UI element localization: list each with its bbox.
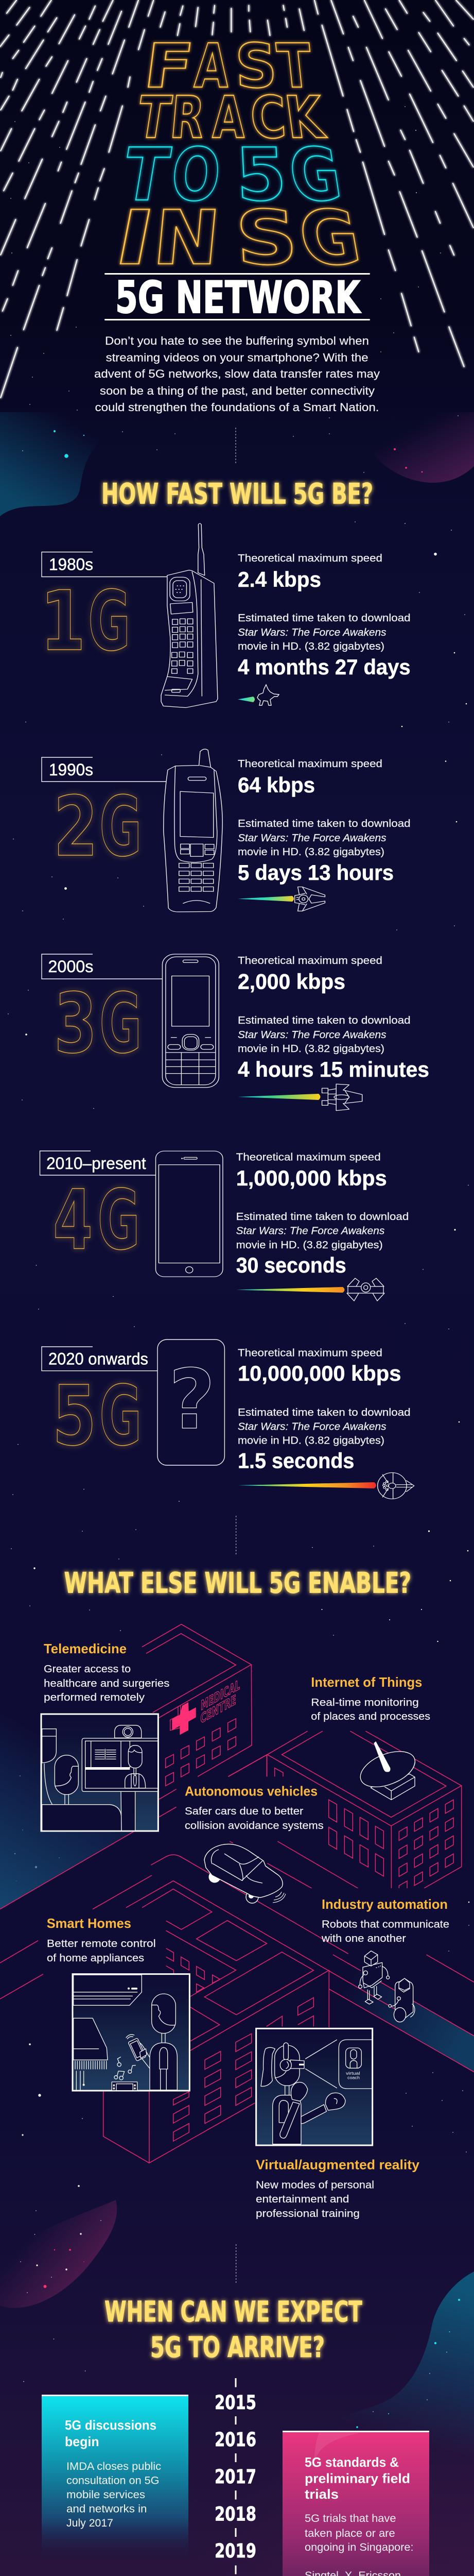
speed text 3G: 4 hours 15 minutes	[238, 1057, 429, 1081]
speed text 4G	[236, 1152, 409, 1277]
robot one	[359, 1951, 390, 2004]
comms building	[229, 1731, 462, 1894]
nebula blob: pink top right	[363, 412, 474, 483]
speed text 4G: Estimated time taken to download	[236, 1211, 409, 1223]
panel: 5G discussions begin: 5G discussions	[65, 2417, 156, 2433]
speed text 1G: Estimated time taken to download	[238, 613, 411, 624]
year label 2010-present	[40, 1151, 155, 1175]
title line: TRACK: K	[281, 83, 329, 151]
speed text 2G: 5 days 13 hours	[238, 860, 394, 885]
neon label 1G	[40, 573, 131, 669]
timeline years: 2017	[215, 2466, 256, 2488]
title line: FAST: F	[140, 30, 198, 101]
glow: city left	[0, 1695, 134, 1909]
panel: 5G standards and trials	[283, 2431, 429, 2576]
speed text 1G: Theoretical maximum speed	[238, 553, 382, 564]
callout: virtual and augmented reality: New modes of personal	[256, 2179, 374, 2191]
heading: When can we expect 5G to arrive?: 5G TO ARRIVE?	[150, 2331, 325, 2364]
speed text 4G: 1,000,000 kbps	[236, 1166, 387, 1190]
nebula blob: blue top left	[0, 412, 106, 516]
intro paragraph: streaming videos on your smartphone? With the	[106, 351, 368, 364]
speed text 3G: movie in HD. (3.82 gigabytes)	[238, 1043, 384, 1055]
panel: 5G standards and trials: 5G trials that have	[305, 2513, 396, 2524]
callout: telemedicine: performed remotely	[44, 1691, 145, 1703]
speed text 5G: 10,000,000 kbps	[238, 1361, 401, 1385]
glow: robot road	[329, 1955, 474, 2072]
title line: TRACK: T	[133, 84, 175, 151]
callout: telemedicine: Greater access to	[44, 1663, 131, 1675]
year label 2010-present: 2010–present	[46, 1154, 146, 1173]
chart: vertical timeline	[215, 2378, 256, 2576]
panel: 5G discussions begin: and networks in	[66, 2503, 147, 2515]
panel: 2G row	[42, 749, 411, 912]
title: Fast Track to 5G in SG	[108, 30, 367, 282]
callout: telemedicine	[44, 1641, 169, 1703]
year label 2000s: 2000s	[48, 957, 93, 976]
speed text 3G	[238, 955, 429, 1081]
intro paragraph	[94, 334, 380, 414]
speed text 4G: movie in HD. (3.82 gigabytes)	[236, 1240, 383, 1251]
speed text 2G: movie in HD. (3.82 gigabytes)	[238, 846, 384, 858]
panel: 5G standards and trials: ongoing in Singapore:	[305, 2541, 414, 2553]
panel: 1G row	[40, 523, 411, 707]
panel: 5G standards and trials: preliminary field	[305, 2471, 410, 2486]
icon: autonomous car	[204, 1844, 286, 1903]
speed streaks	[0, 0, 473, 398]
callout: telemedicine: Telemedicine	[44, 1641, 127, 1656]
title line: TO 5G	[117, 133, 347, 217]
neon label 3G: 3	[54, 975, 97, 1072]
neon label 5G: G	[99, 1368, 142, 1464]
speed text 4G: Theoretical maximum speed	[236, 1152, 381, 1163]
label: virtual coach: virtual	[346, 2071, 360, 2076]
label: virtual coach: coach	[347, 2075, 360, 2080]
title line: IN SG: N	[150, 195, 224, 282]
callout: autonomous vehicles: Safer cars due to better	[185, 1805, 303, 1817]
speed text 1G: 4 months 27 days	[238, 655, 411, 679]
panel: 4G row	[40, 1151, 409, 1301]
title line: TRACK: A	[212, 84, 245, 151]
icon: mystery phone with question mark	[157, 1340, 224, 1465]
icon: 1990s mobile phone	[164, 749, 222, 912]
neon label 4G: 4	[53, 1172, 93, 1268]
subtitle: 5G Network: 5G NETWORK	[115, 272, 361, 324]
callout: industry automation: Industry automation	[322, 1896, 448, 1912]
speed text 3G: 2,000 kbps	[238, 969, 345, 993]
timeline years: 2015	[215, 2392, 256, 2414]
dashed connector 3	[236, 2244, 237, 2283]
picture: telemedicine scene	[41, 1714, 158, 1831]
dashed connector 1	[235, 428, 236, 465]
upper right of lower block and road	[267, 1955, 474, 2072]
icon: brick phone	[161, 523, 218, 707]
neon label 2G: G	[99, 778, 142, 875]
label: virtual coach	[346, 2071, 360, 2080]
year label 2020 onwards: 2020 onwards	[48, 1350, 148, 1368]
trail and starfighter icon	[238, 1084, 362, 1111]
trail and falcon icon	[238, 1472, 414, 1499]
panel: 5G discussions begin: consultation on 5G	[66, 2475, 160, 2486]
title line: FAST: T	[274, 30, 315, 101]
neon label 5G: 5	[52, 1368, 96, 1464]
speed text 5G: Theoretical maximum speed	[238, 1348, 382, 1359]
panel: 5G discussions begin	[42, 2395, 188, 2560]
callout: autonomous vehicles	[185, 1784, 324, 1832]
neon label 1G: G	[88, 573, 131, 669]
trail and TIE fighter icon	[236, 1278, 384, 1301]
timeline years	[215, 2392, 256, 2576]
speed text 1G: movie in HD. (3.82 gigabytes)	[238, 641, 384, 652]
neon label 4G	[53, 1172, 140, 1268]
title line: TRACK: C	[249, 83, 288, 151]
heading: How fast will 5G be?: HOW FAST WILL 5G BE?	[101, 477, 373, 511]
speed text 5G: Estimated time taken to download	[238, 1407, 411, 1418]
intro paragraph: advent of 5G networks, slow data transfer rates may	[94, 367, 380, 380]
neon label 3G	[54, 975, 142, 1072]
dashed connector 2	[236, 1516, 237, 1554]
neon label 5G	[52, 1368, 142, 1464]
title line: TO 5G: T	[117, 133, 175, 217]
speed text 1G: Star Wars: The Force Awakens	[238, 627, 387, 638]
panel: 5G discussions begin: July 2017	[66, 2517, 113, 2529]
timeline years: 2016	[215, 2429, 256, 2451]
speed text 2G	[238, 758, 411, 885]
callout: smart homes: of home appliances	[47, 1952, 144, 1964]
title line: TO 5G: G	[284, 133, 347, 217]
callout: telemedicine: healthcare and surgeries	[44, 1677, 169, 1689]
speed text 5G: Star Wars: The Force Awakens	[238, 1421, 387, 1432]
speed text 5G	[238, 1348, 411, 1472]
sign: Medical Centre: MEDICAL	[201, 1677, 240, 1714]
title line: TO 5G: 5	[234, 133, 288, 217]
intro paragraph: could strengthen the foundations of a Smart Nation.	[95, 401, 379, 414]
panel: 5G standards and trials: trials	[305, 2486, 339, 2502]
speed text 3G: Estimated time taken to download	[238, 1015, 411, 1026]
callout: smart homes: Smart Homes	[47, 1916, 131, 1931]
callout: virtual and augmented reality: Virtual/augmented reality	[256, 2157, 420, 2173]
panel: 5G discussions begin: begin	[65, 2434, 99, 2449]
callout: virtual and augmented reality: entertainment and	[256, 2193, 349, 2205]
speed text 3G: Star Wars: The Force Awakens	[238, 1029, 387, 1041]
timeline years: 2019	[215, 2540, 256, 2562]
title line: IN SG	[108, 194, 367, 282]
panel: 5G row	[42, 1340, 414, 1499]
icon: mystery phone with question mark: ?	[169, 1351, 215, 1448]
speed text 2G: Estimated time taken to download	[238, 818, 411, 829]
panel: 5G discussions begin: mobile services	[66, 2489, 145, 2501]
picture: smart home scene	[73, 1974, 189, 2091]
icon: smartphone	[156, 1151, 223, 1277]
sign: Medical Centre: CENTRE	[200, 1692, 236, 1727]
speed text 1G	[238, 553, 411, 679]
icon: satellite dish	[355, 1741, 420, 1800]
title line: IN SG: S	[233, 195, 300, 282]
title line: IN SG: I	[108, 194, 161, 282]
neon label 3G: G	[99, 975, 142, 1072]
year label 1980s	[42, 552, 167, 577]
lower left housing block	[0, 1855, 403, 2163]
speed text 2G: Star Wars: The Force Awakens	[238, 833, 387, 844]
title line: IN SG: G	[292, 195, 367, 282]
heading: When can we expect 5G to arrive?	[104, 2295, 362, 2364]
medical centre building	[58, 1624, 267, 1875]
speed text 2G: Theoretical maximum speed	[238, 758, 382, 770]
icon: music notes	[114, 2057, 135, 2080]
nebula blob: blue lower right	[304, 2272, 474, 2473]
title line: TO 5G: O	[168, 133, 223, 217]
callout: industry automation: Robots that communicate	[322, 1919, 449, 1930]
neon label 2G	[54, 778, 142, 875]
year label 1990s: 1990s	[49, 760, 93, 779]
speed text 3G: Theoretical maximum speed	[238, 955, 382, 967]
callout: smart homes: Better remote control	[47, 1938, 156, 1950]
neon label 1G: 1	[40, 573, 85, 669]
panel: 5G standards and trials: 5G standards &	[305, 2454, 399, 2470]
timeline ticks and arrows	[229, 2378, 242, 2576]
trail and fighter icon	[238, 887, 325, 911]
intro paragraph: Don’t you hate to see the buffering symbol when	[105, 334, 369, 347]
speed text 4G: 30 seconds	[236, 1253, 346, 1277]
sign: Medical Centre	[200, 1677, 240, 1727]
icon: 2000s mobile phone	[162, 954, 219, 1088]
title line: FAST: S	[234, 30, 278, 101]
callout: internet of things	[311, 1674, 430, 1722]
speed text 1G: 2.4 kbps	[238, 567, 321, 591]
callout: autonomous vehicles: Autonomous vehicles	[185, 1784, 318, 1799]
year label 1980s: 1980s	[49, 555, 93, 574]
callout: industry automation: with one another	[321, 1933, 406, 1944]
title line: FAST	[140, 30, 315, 101]
speed text 2G: 64 kbps	[238, 773, 315, 797]
panel: 3G row	[42, 954, 429, 1111]
year label 2020 onwards	[42, 1347, 157, 1371]
nebula blob: pink lower left	[0, 2200, 117, 2308]
callout: internet of things: of places and processes	[311, 1710, 430, 1722]
neon label 4G: G	[98, 1172, 140, 1268]
picture: virtual reality scene	[256, 2028, 373, 2145]
speed text 4G: Star Wars: The Force Awakens	[236, 1225, 384, 1236]
callout: virtual and augmented reality	[256, 2157, 420, 2219]
year label 1990s	[42, 757, 166, 782]
title line: TRACK	[133, 83, 329, 151]
timeline years: 2018	[215, 2503, 256, 2526]
chart: isometric city line drawing	[0, 1624, 474, 2163]
title line: TRACK: R	[168, 83, 207, 151]
robot two	[389, 1978, 415, 2022]
trail and tauntaun icon	[238, 685, 279, 705]
heading: When can we expect 5G to arrive?: WHEN CAN WE EXPECT	[104, 2295, 362, 2329]
icon: medical cross	[170, 1702, 196, 1735]
callout: smart homes	[47, 1916, 156, 1964]
title line: FAST: A	[193, 30, 231, 101]
speed text 5G: 1.5 seconds	[238, 1449, 354, 1472]
callout: virtual and augmented reality: professional training	[256, 2208, 360, 2219]
panel: 5G standards and trials: taken place or are	[305, 2528, 395, 2539]
callout: internet of things: Real-time monitoring	[311, 1697, 419, 1708]
intro paragraph: soon be a thing of the past, and better connectivity	[100, 384, 375, 397]
speed text 5G: movie in HD. (3.82 gigabytes)	[238, 1435, 384, 1447]
year label 2000s	[42, 954, 162, 979]
callout: internet of things: Internet of Things	[311, 1674, 422, 1690]
icon: robots	[359, 1951, 415, 2022]
callout: autonomous vehicles: collision avoidance systems	[185, 1820, 324, 1832]
callout: industry automation	[321, 1896, 449, 1944]
panel: 5G discussions begin: IMDA closes public	[66, 2461, 161, 2472]
neon label 2G: 2	[54, 778, 98, 875]
